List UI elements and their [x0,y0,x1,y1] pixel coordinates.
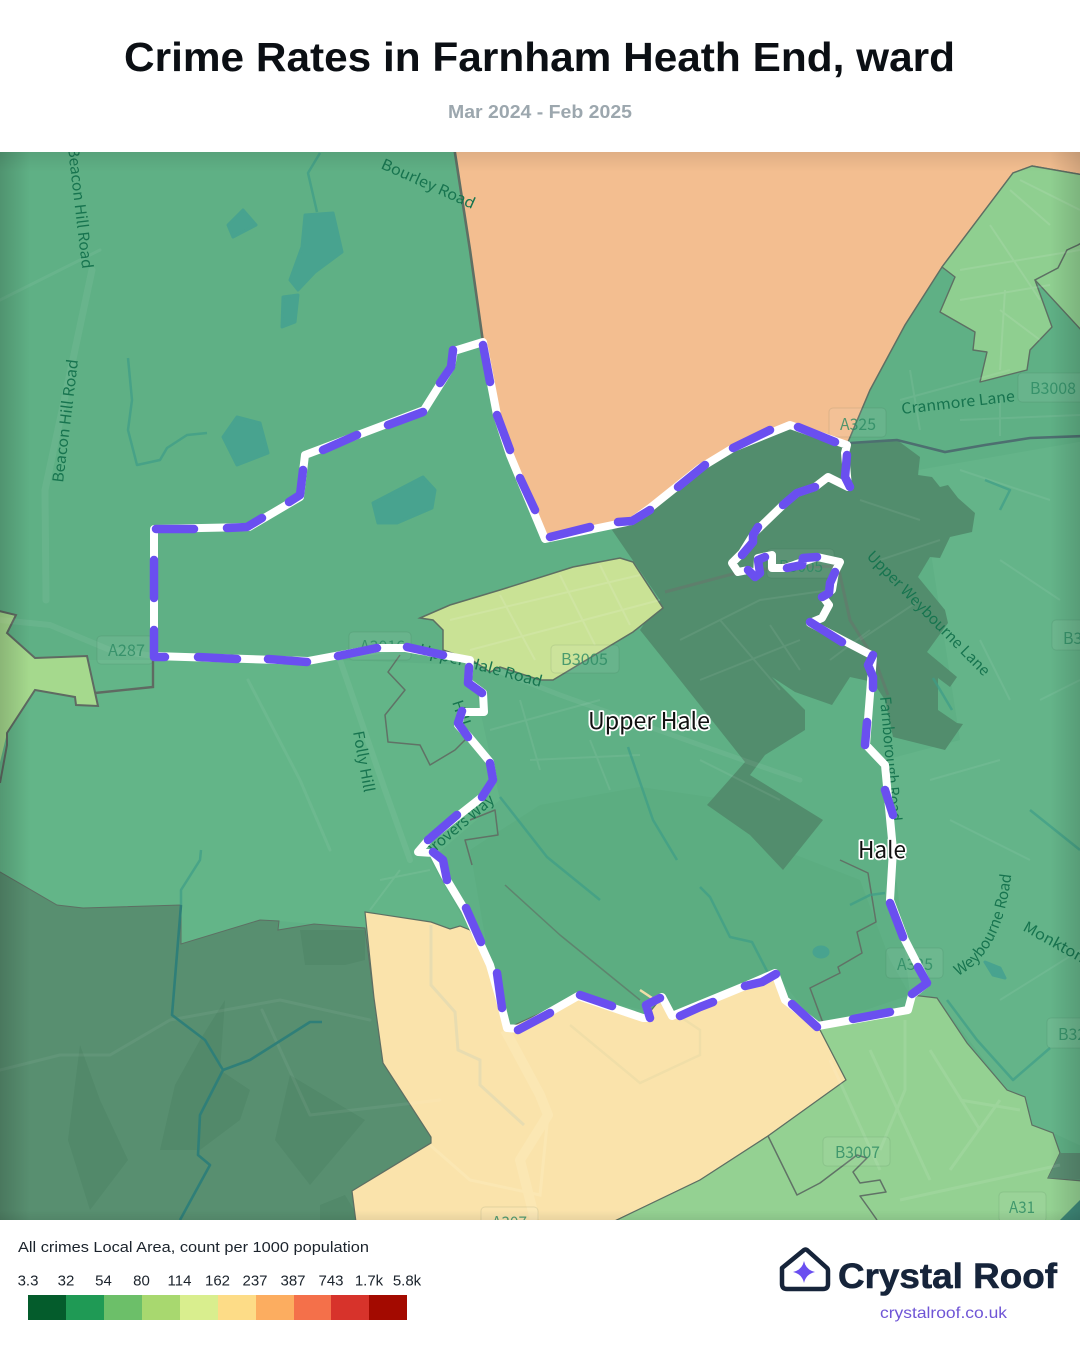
area: north-east right light green [1034,243,1080,330]
area: ward south patch [470,787,910,1028]
legend title: All crimes Local Area, count per 1000 population [18,1239,369,1256]
legend [18,1239,422,1320]
lakes [223,210,1005,978]
road: cream access [430,1115,548,1195]
vignette: top [0,152,1080,172]
area: west light green [0,612,97,762]
road label: Upper Hale Road: Upper Hale Road [417,639,545,692]
road label: Upper Weybourne Lane: Upper Weybourne Lane [862,546,995,680]
legend tick labels: 162 [205,1272,230,1290]
icon: crystal star [793,1261,815,1283]
area: orange high crime [453,140,1080,539]
road label: Cranmore Lane: Cranmore Lane [900,385,1016,419]
legend tick labels: 1.7k [355,1272,384,1290]
vignette: right [1050,152,1080,1220]
road: dark zone street [665,566,888,695]
road label: Beacon Hill Road north: Beacon Hill Road [63,146,98,270]
road shield: B32 [1047,1018,1080,1048]
road shield: B3008 [1018,373,1080,402]
legend tick labels: 237 [242,1272,268,1290]
road shield: A3016 [349,632,411,660]
road shield: A31 [999,1192,1046,1222]
road shield: A307: A307 [492,1209,527,1233]
road shield: B3005 east [767,549,834,578]
ward boundary white [154,342,927,1029]
road shield: A325 south [886,948,943,978]
road: cream grey track [431,925,524,1125]
legend tick labels: 5.8k [393,1272,422,1290]
road shield: A31: A31 [1009,1194,1035,1218]
road label: Folly Hill: Folly Hill [348,729,380,794]
road shield: B3005 west: B3005 [561,646,608,670]
area: south-west darker patches [364,930,365,931]
area: eastern mid green [885,440,1080,1150]
road label: Bourley Road: Bourley Road [378,153,479,214]
boundary: west line [95,660,153,693]
road label: Drovers Way: Drovers Way [418,789,499,862]
road shield: A287: A287 [108,637,145,661]
road shield: A325 south: A325 [897,951,933,975]
icon: house [782,1250,828,1289]
boundary: northern river edge [850,436,1080,452]
legend tick labels: 743 [318,1272,344,1290]
road shield: B3008: B3008 [1030,375,1076,399]
boundary: inner squiggles [385,655,886,1220]
road: cream secondary [570,990,700,1083]
road shield: A325 north: A325 [840,411,876,435]
road shield: B3 [1052,620,1080,650]
area: yellow-green [420,558,663,680]
road shield: A307 [481,1207,538,1237]
road shield: A3016: A3016 [360,633,405,657]
area: south-east teal corner [1060,1200,1080,1220]
road label: Beacon Hill Road south: Beacon Hill Road [47,358,83,484]
area: south-east light green [596,995,1080,1230]
legend colour scale [28,1295,407,1320]
street mesh: east [930,470,1080,1000]
road shield: B3005 east: B3005 [779,553,823,577]
rivers [128,153,1080,1220]
road shield: B3005 west [551,645,619,673]
area: north-east light green [940,166,1080,382]
boundary: west pocket outline [0,610,98,783]
legend tick labels: 114 [168,1272,191,1290]
place label: Upper Hale: Upper Hale [588,702,710,736]
legend tick labels: 54 [95,1272,112,1290]
road shield: B3007: B3007 [835,1139,880,1163]
area: southern mid green [0,660,500,944]
vignette: left [0,152,30,1220]
logo wordmark: Crystal Roof [838,1257,1057,1296]
title: Crime Rates in Farnham Heath End, ward [124,34,955,80]
street mesh: cranmore [900,370,1080,436]
street mesh: upper hale [370,700,780,910]
area: dark green south-west [0,869,431,1230]
road shield: B3007 [823,1137,890,1166]
road label: Hill: Hill [447,697,475,728]
area: dark green centre [612,425,975,870]
website link: crystalroof.co.uk [880,1305,1008,1322]
area: south-east dark wedge [1048,1153,1080,1180]
street mesh: yellow zone [450,565,660,660]
legend tick labels [18,1272,422,1290]
legend tick labels: 3.3 [18,1272,38,1290]
place label: Hale: Hale [858,831,906,865]
boundary: orange edge thick [453,140,483,342]
road shield: A287 [97,636,153,664]
street mesh: north-east [960,180,1080,370]
legend tick labels: 80 [133,1272,150,1290]
road label: Weybourne Road: Weybourne Road [952,874,1012,975]
legend tick labels: 387 [280,1272,306,1290]
street mesh: dark zone [680,500,940,690]
road shield: A325 north [829,408,886,437]
subtitle: date range: Mar 2024 - Feb 2025 [448,102,632,122]
street mesh: south-east [830,1020,1060,1200]
road network [0,180,1080,1220]
road: cream bypass [505,1030,548,1220]
ward boundary purple dashes [154,345,927,1030]
vignette: bottom [0,1210,1080,1220]
road label: Farnborough Road: Farnborough Road [875,696,907,822]
area: cream [352,912,846,1230]
logo: Crystal Roof [782,1250,1057,1322]
legend tick labels: 32 [58,1272,74,1290]
